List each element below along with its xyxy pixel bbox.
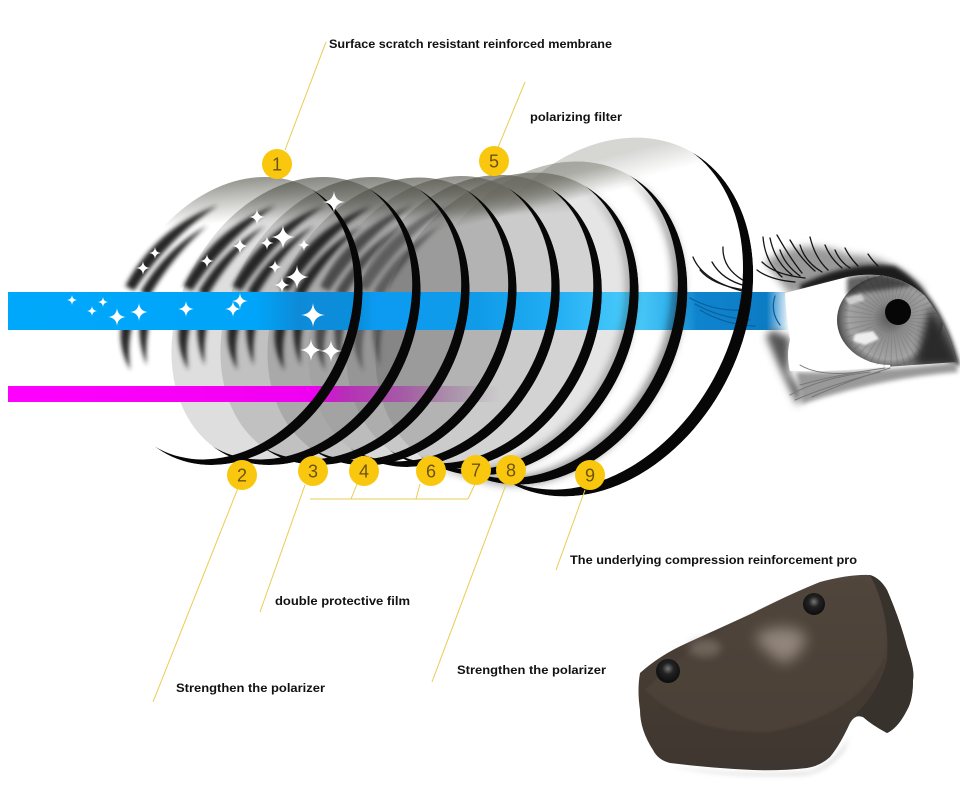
label 5: polarizing filter — [530, 110, 622, 124]
badge 9 — [575, 460, 605, 490]
pupil — [885, 299, 911, 325]
magenta light beam — [8, 386, 500, 402]
rim 8 — [352, 112, 742, 534]
badge 7: 7 — [471, 460, 481, 480]
blue light beam — [8, 292, 790, 330]
badge 8 — [496, 455, 526, 485]
left soft eye shadow — [766, 330, 802, 406]
badge 5 — [479, 146, 509, 176]
rim 7 — [324, 126, 690, 522]
label 9: The underlying compression reinforcement pro — [570, 553, 857, 567]
leader lines — [153, 42, 585, 702]
badge 1 — [262, 149, 292, 179]
lens 8 body — [352, 112, 742, 534]
rim 3 — [172, 133, 518, 509]
badge 3: 3 — [308, 462, 318, 482]
badge 5: 5 — [489, 152, 499, 172]
badge 7 — [461, 455, 491, 485]
brow-side lash shading — [765, 246, 925, 295]
badge 1: 1 — [272, 154, 282, 174]
visor soft shadow — [670, 735, 850, 776]
upper lid dark band — [800, 265, 960, 366]
badge 8: 8 — [506, 460, 516, 480]
badge 2 — [227, 460, 257, 490]
badge 4: 4 — [359, 462, 369, 482]
lens 9 body — [386, 84, 814, 550]
lens 3 body — [172, 133, 518, 509]
rim 1 — [65, 133, 411, 509]
lens 2 body — [123, 133, 469, 509]
eyelashes — [693, 235, 878, 291]
rim 2 — [123, 133, 469, 509]
rim 9 — [386, 84, 814, 550]
badge 9: 9 — [585, 466, 595, 486]
eye white and iris — [785, 274, 956, 372]
lens stack: translucent lens bodies — [65, 84, 814, 550]
label 8: Strengthen the polarizer — [457, 663, 606, 677]
visor outer shell — [638, 575, 913, 770]
rim 6 — [296, 130, 652, 514]
lens 4 body — [219, 134, 565, 509]
rim 5 — [259, 132, 609, 511]
lens 1 body — [65, 133, 411, 509]
soft inner shadow, lens 8 — [348, 112, 738, 534]
badge 3 — [298, 456, 328, 486]
visor button left — [656, 659, 680, 683]
badge 2: 2 — [237, 466, 247, 486]
badge 6: 6 — [426, 462, 436, 482]
label 1: Surface scratch resistant reinforced membrane — [329, 37, 612, 51]
lens stack: black rim arcs — [65, 84, 814, 550]
lower lashes — [790, 365, 890, 400]
label 3: double protective film — [275, 594, 410, 608]
visor upper panel — [645, 582, 886, 732]
lens 5 body — [259, 132, 609, 511]
number badges — [227, 146, 605, 490]
lens 6 body — [296, 130, 652, 514]
visor small highlight — [689, 639, 721, 657]
eye — [690, 235, 960, 406]
helmet visor product — [638, 575, 913, 776]
visor button top — [803, 593, 825, 615]
rim 4 — [219, 134, 565, 509]
label 2: Strengthen the polarizer — [176, 681, 325, 695]
lower lid shading — [796, 362, 958, 404]
badge 6 — [416, 456, 446, 486]
soft inner shadow, lens 7 — [321, 126, 687, 522]
visor highlight — [755, 627, 805, 664]
lens 7 body — [324, 126, 690, 522]
sparkles — [67, 191, 345, 362]
badge 4 — [349, 456, 379, 486]
lashes over the blue beam — [690, 296, 780, 326]
visor side panel — [855, 575, 913, 733]
